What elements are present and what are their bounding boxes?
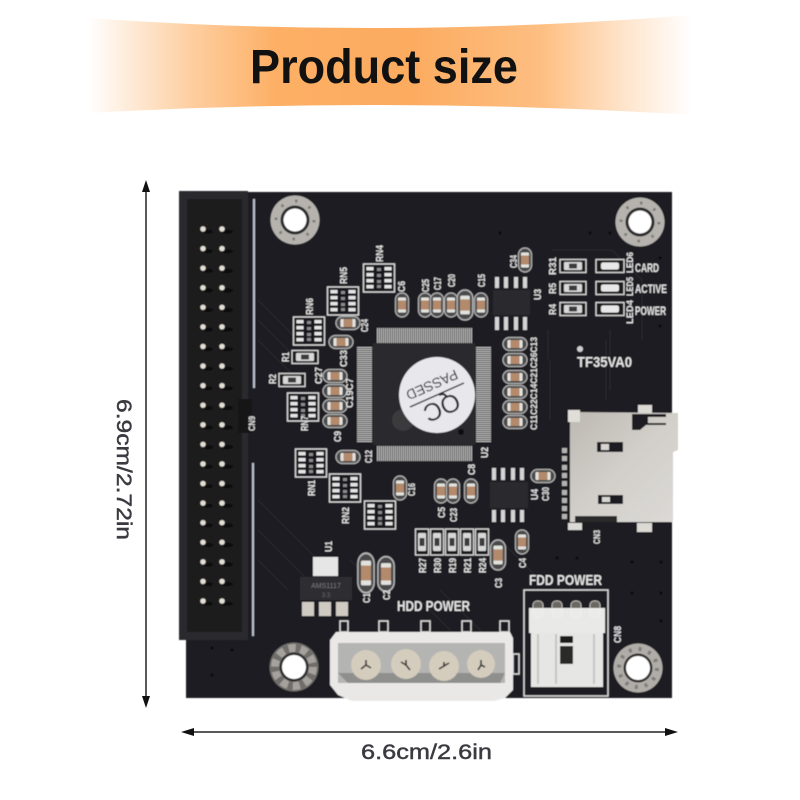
silkscreen labels: R5: [548, 283, 559, 294]
main chip U2: [364, 336, 484, 454]
circuit board: [179, 191, 678, 701]
capacitors: [323, 248, 555, 593]
silkscreen labels: R4: [548, 304, 559, 315]
mounting hole bottom left: [270, 642, 318, 692]
silkscreen labels: C4: [518, 558, 529, 568]
mounting hole top right: [616, 198, 664, 246]
silkscreen labels: C34: [509, 255, 520, 268]
silkscreen labels: C27: [314, 367, 325, 384]
silkscreen labels: C33: [339, 350, 350, 367]
QC passed sticker: PASSED: [404, 367, 460, 403]
width label: 6.6cm/2.6in: [361, 741, 492, 764]
height label: 6.9cm/2.72in: [112, 399, 135, 540]
silkscreen labels: C15: [477, 274, 488, 287]
mounting hole top left: [270, 196, 320, 244]
label CN9: CN9: [247, 416, 257, 431]
title banner: [88, 15, 692, 115]
silkscreen labels: RN6: [305, 298, 316, 315]
silkscreen labels: R2: [268, 374, 279, 384]
IDE header connector: [179, 191, 252, 640]
silkscreen labels: CN8: [613, 626, 624, 643]
resistor networks: [288, 264, 396, 529]
silkscreen labels: LED4: [625, 300, 635, 324]
silkscreen labels: R24: [478, 558, 489, 573]
silkscreen labels: C16: [407, 483, 418, 496]
board base: [186, 192, 672, 698]
silkscreen labels: HDD POWER: [397, 598, 470, 615]
silkscreen labels: C30: [541, 487, 552, 501]
silkscreen labels: C3: [494, 578, 505, 588]
silkscreen labels: U3: [533, 289, 544, 300]
silkscreen labels: [268, 245, 667, 643]
silkscreen labels: RN7: [300, 416, 311, 431]
arrow: height dimension: [142, 180, 150, 708]
silkscreen labels: C23: [449, 508, 460, 522]
silkscreen labels: C9: [333, 431, 344, 442]
silkscreen labels: FDD POWER: [529, 572, 602, 589]
mounting hole bottom right: [614, 644, 662, 692]
silkscreen labels: C1: [362, 593, 373, 603]
silkscreen labels: CN3: [592, 530, 602, 544]
silkscreen labels: R30: [433, 558, 444, 573]
QC passed sticker: QC: [419, 387, 464, 428]
QC passed sticker: [399, 357, 475, 433]
silkscreen labels: U4: [530, 489, 541, 500]
silkscreen labels: RN1: [307, 480, 318, 496]
silkscreen labels: C5: [437, 507, 448, 518]
microSD card slot: [562, 405, 678, 532]
silkscreen labels: C20: [447, 274, 458, 287]
resistors: [279, 260, 586, 555]
FDD power connector: [524, 590, 608, 696]
HDD power molex connector: [330, 621, 519, 701]
silkscreen labels: C11C22C14C21C26C13: [529, 337, 540, 430]
silkscreen labels: C19C7: [345, 378, 356, 408]
header silkscreen lines: [253, 199, 254, 636]
silkscreen labels: ACTIVE: [635, 282, 667, 296]
silkscreen labels: R19: [448, 558, 459, 573]
silkscreen labels: C12: [364, 450, 375, 463]
silkscreen labels: TF35VA0: [577, 354, 632, 371]
status LEDs: [596, 260, 624, 316]
IC U3: [493, 277, 530, 330]
silkscreen labels: CARD: [635, 261, 659, 275]
silkscreen labels: R31: [548, 257, 559, 275]
silkscreen labels: LED6: [625, 252, 635, 273]
silkscreen labels: R27: [418, 558, 429, 573]
silkscreen labels: RN2: [341, 507, 352, 524]
silkscreen labels: RN4: [375, 245, 386, 262]
silkscreen labels: C6: [397, 281, 408, 292]
faint traces: [258, 250, 642, 650]
silkscreen labels: C2: [382, 590, 393, 600]
voltage regulator U1: 3.3: [322, 593, 331, 599]
voltage regulator U1: [300, 557, 352, 616]
silkscreen labels: RN5: [339, 267, 350, 284]
voltage regulator U1: AMS1117: [311, 583, 341, 590]
silkscreen labels: LED5: [625, 277, 635, 296]
title: Product size: [250, 41, 518, 94]
silkscreen labels: U1: [324, 541, 335, 552]
silkscreen labels: R1: [281, 352, 292, 362]
arrow: width dimension: [181, 728, 678, 736]
silkscreen labels: C17: [433, 277, 444, 290]
silkscreen labels: R21: [463, 558, 474, 573]
silkscreen labels: U2: [480, 447, 491, 458]
IC U4: [490, 468, 528, 522]
silkscreen labels: C24: [360, 319, 371, 332]
silkscreen labels: C8: [467, 464, 478, 475]
silkscreen labels: POWER: [635, 304, 666, 318]
silkscreen labels: C25: [421, 279, 432, 292]
